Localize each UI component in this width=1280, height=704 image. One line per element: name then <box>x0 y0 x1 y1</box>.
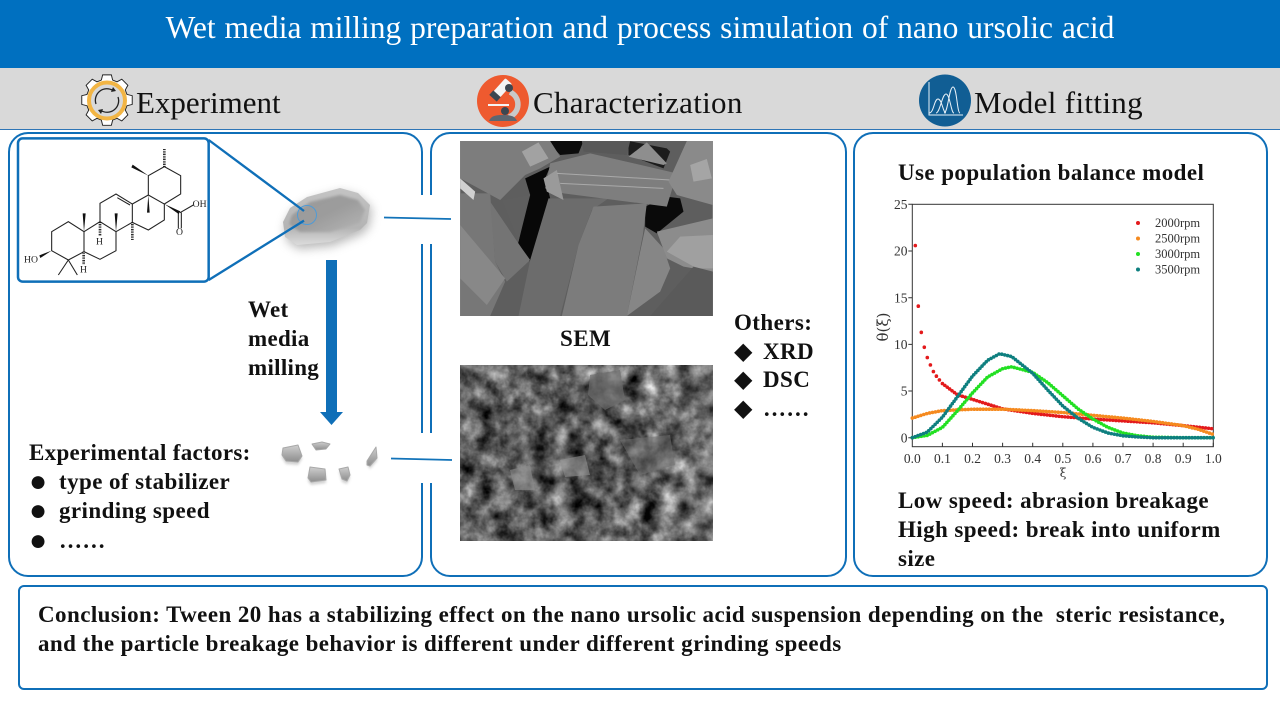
axes <box>912 204 1213 447</box>
conclusion text: and the particle breakage behavior is different under different grinding speeds <box>38 631 842 656</box>
scatter chart: theta vs xi: θ(ξ) <box>874 312 892 342</box>
factor: type of stabilizer: ● <box>29 465 47 498</box>
x axis labels: 0.6 <box>1084 451 1102 466</box>
factor: grinding speed: ● <box>29 494 47 527</box>
molecule: ursolic acid structure with zoom callout: HO <box>24 255 38 266</box>
molecule: ursolic acid structure with zoom callout: H <box>80 265 87 276</box>
label: wet media milling: media <box>248 326 310 351</box>
callout lines <box>209 140 304 280</box>
x axis labels: 0.7 <box>1115 451 1132 466</box>
heading: Experiment: Experiment <box>136 85 281 120</box>
series 2000rpm <box>915 246 1213 429</box>
section header band <box>0 68 1280 130</box>
series 3000rpm <box>912 367 1213 438</box>
x axis labels: 0.2 <box>964 451 981 466</box>
y axis labels: 10 <box>894 337 908 352</box>
text block: breakage findings: High speed: break into uniform <box>898 517 1221 542</box>
item: ellipsis: …… <box>763 396 810 421</box>
image: SEM of milled powder <box>460 365 713 541</box>
factor: type of stabilizer <box>29 465 230 498</box>
series 3500rpm <box>912 354 1213 438</box>
y axis labels: 15 <box>894 290 908 306</box>
x axis labels: 0.8 <box>1145 451 1162 466</box>
factor: ellipsis: ● <box>29 524 47 557</box>
molecule: ursolic acid structure with zoom callout: O <box>176 227 183 238</box>
panel: characterization <box>430 132 846 577</box>
molecule frame <box>18 138 209 282</box>
y axis labels: 25 <box>894 197 908 212</box>
label: wet media milling: Wet <box>248 297 288 322</box>
factor: type of stabilizer: type of stabilizer <box>59 469 230 494</box>
text block: breakage findings: Low speed: abrasion breakage <box>898 488 1209 513</box>
item: XRD: ◆ <box>734 339 752 365</box>
conclusion text <box>38 602 1225 656</box>
legend <box>1136 216 1200 276</box>
molecule: ursolic acid structure with zoom callout <box>16 137 305 283</box>
item: XRD <box>734 339 814 365</box>
skeletal formula <box>52 167 193 275</box>
factor: grinding speed <box>29 494 210 527</box>
text block: breakage findings: size <box>898 546 935 571</box>
molecule: ursolic acid structure with zoom callout: OH <box>193 199 207 210</box>
series 2500rpm <box>912 409 1213 434</box>
panel: conclusion <box>18 585 1268 690</box>
panel: model fitting <box>852 132 1268 577</box>
white gaps in panel borders <box>418 195 434 244</box>
label: SEM: SEM <box>560 326 611 351</box>
label: wet media milling: milling <box>248 355 319 380</box>
item: DSC <box>734 367 810 393</box>
x axis labels: 0.0 <box>904 451 921 466</box>
legend: 2500rpm <box>1155 232 1200 246</box>
molecule: ursolic acid structure with zoom callout: H <box>96 237 103 248</box>
factor: ellipsis: …… <box>59 528 106 553</box>
factor: grinding speed: grinding speed <box>59 498 210 523</box>
title banner: Wet media milling preparation and process simulation of nano ursolic acid <box>166 10 1114 45</box>
y axis labels: 5 <box>901 384 908 398</box>
x axis labels: 0.9 <box>1175 451 1192 466</box>
heading: Characterization: Characterization <box>533 85 743 120</box>
x axis labels: 0.4 <box>1024 451 1041 466</box>
x axis labels: 1.0 <box>1205 451 1222 466</box>
label: wet media milling <box>248 297 319 380</box>
item: ellipsis: ◆ <box>734 396 752 422</box>
y axis labels: 20 <box>894 244 908 258</box>
image: SEM of raw plates <box>460 141 713 316</box>
legend: 2000rpm <box>1155 216 1200 230</box>
text block: experimental factors: Experimental factors: <box>29 440 251 465</box>
x axis labels <box>904 451 1222 466</box>
x axis labels: 0.5 <box>1054 451 1071 466</box>
title banner <box>0 0 1280 68</box>
axis titles: ξ <box>1060 466 1067 480</box>
item: DSC: DSC <box>763 367 810 392</box>
x axis labels: 0.1 <box>934 451 951 466</box>
x axis labels: 0.3 <box>994 451 1011 466</box>
factor: ellipsis <box>29 524 106 557</box>
text block: breakage findings <box>898 488 1221 571</box>
heading: Model fitting: Model fitting <box>974 85 1143 120</box>
heading: use population balance model: Use population balance model <box>898 160 1204 185</box>
y axis labels <box>894 197 908 446</box>
legend: 3000rpm <box>1155 247 1200 261</box>
item: ellipsis <box>734 396 810 422</box>
item: XRD: XRD <box>763 339 814 364</box>
y axis labels: 0 <box>901 430 908 446</box>
text block: others: Others: <box>734 310 812 335</box>
conclusion text: Conclusion: Tween 20 has a stabilizing effect on the nano ursolic acid suspension depending on the steric resistance, <box>38 602 1225 627</box>
legend: 3500rpm <box>1155 262 1200 276</box>
item: DSC: ◆ <box>734 367 752 393</box>
panel: experiment <box>8 132 423 577</box>
